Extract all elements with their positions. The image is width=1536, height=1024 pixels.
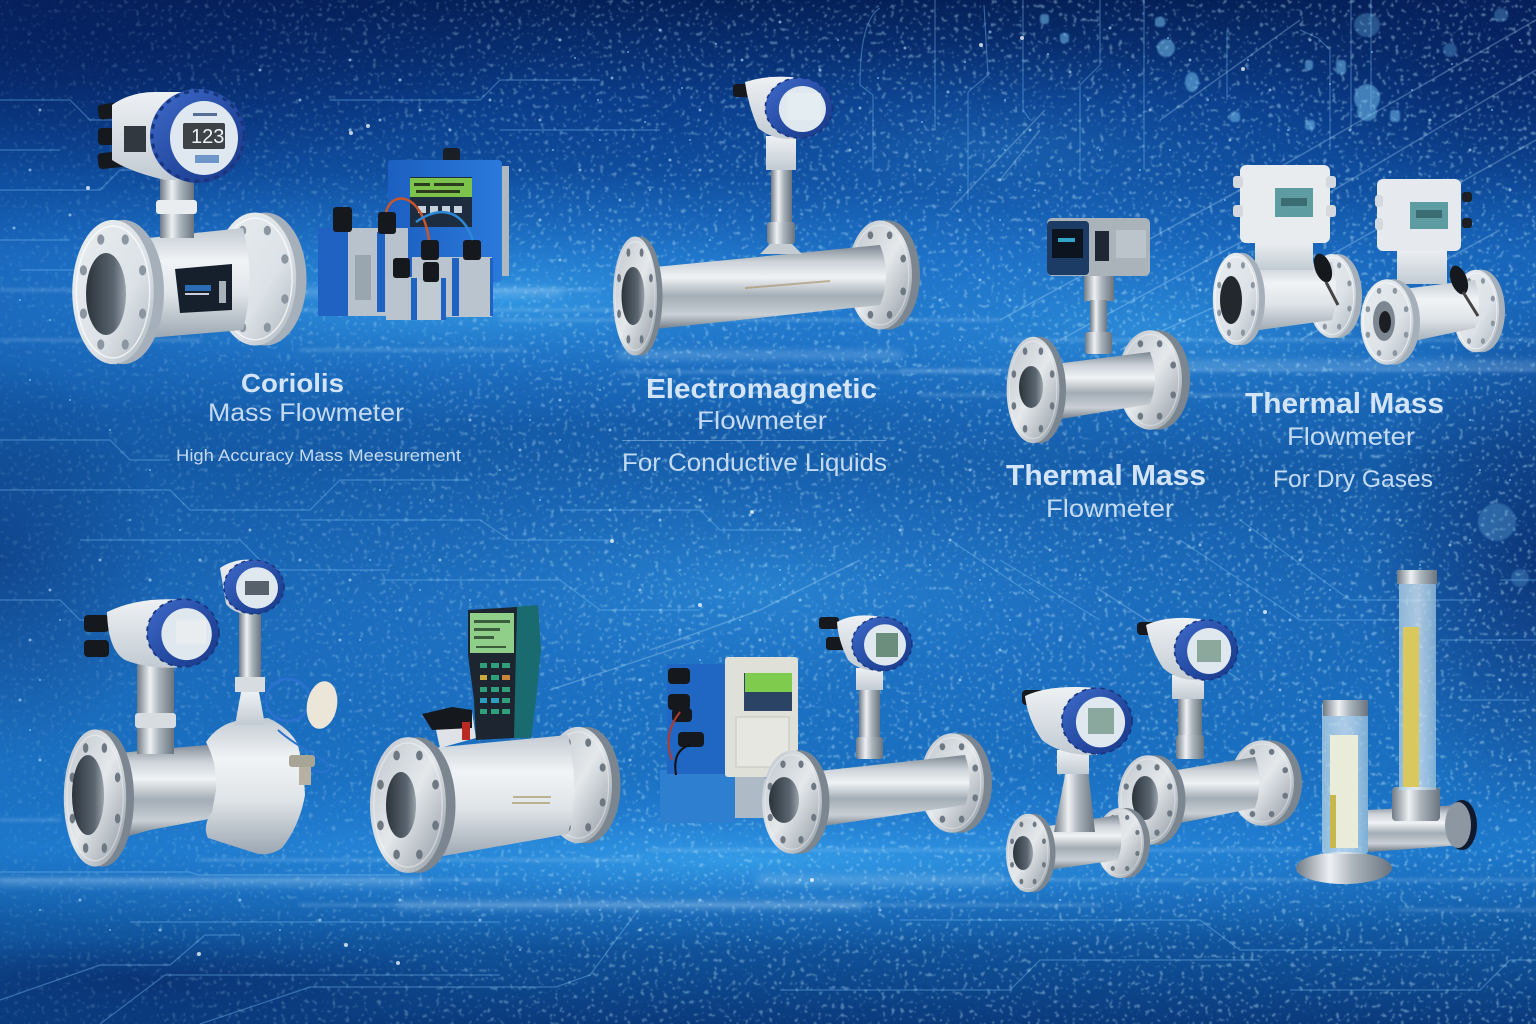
stem [856,668,883,759]
clamp [422,707,476,748]
box transmitter [1047,218,1150,276]
housing and bezel [112,89,246,183]
heading: Thermal Mass right [1245,388,1444,493]
wall-mount blue panel [388,148,509,282]
meter: thermal mass flowmeter, left [1007,218,1190,443]
heading: Thermal Mass left: Thermal Mass [1006,460,1206,492]
heading: Thermal Mass right: Thermal Mass [1245,388,1444,420]
head [1022,687,1132,774]
heading: Thermal Mass left [1006,460,1206,523]
heading: Electromagnetic: Flowmeter [697,407,827,435]
meter: front small flowmeter [1006,687,1150,892]
meter: short rotameter [1296,700,1392,884]
bore [86,253,126,335]
small stem [235,612,265,725]
neck [1255,240,1313,270]
heading: Electromagnetic [622,373,887,477]
cables [386,199,473,240]
heading: Thermal Mass right: For Dry Gases [1273,466,1433,493]
head [819,615,912,671]
blue side box [660,657,798,823]
small head [220,560,284,614]
meter: Coriolis mass flowmeter [72,89,306,364]
main head [84,599,219,668]
heading: Thermal Mass right: Flowmeter [1287,423,1415,451]
sensor cap [1310,251,1338,305]
meter: electromagnetic flowmeter [613,77,920,356]
heading: Coriolis: Coriolis [241,368,344,398]
pipe [120,743,230,838]
bulged body [206,718,305,854]
white pipe body [148,228,250,338]
heading: Thermal Mass left: Flowmeter [1046,495,1174,523]
meter: transmitter box with steel pipe [660,615,992,854]
meter: blue transmitter cluster [318,148,509,320]
stem [1084,275,1114,354]
neck and collar [156,172,197,238]
meter: white thermal pair, B [1361,179,1505,365]
meter: silver vortex with bulged body [64,560,341,867]
meter: silver body with handheld unit [370,605,620,873]
LCD display: 123 [191,126,224,148]
head [1137,618,1238,680]
heading: Coriolis: High Accuracy Mass Meesurement [176,446,461,465]
steel pipe [645,245,886,330]
connectors [97,101,129,169]
LCD display [183,113,225,163]
large stem [135,664,176,754]
box [1375,179,1472,251]
transmitter head [733,77,833,139]
handheld terminal [468,605,541,740]
label plate [175,264,232,313]
heading: Coriolis [176,368,461,465]
sensor boxes [318,207,408,316]
box [1233,165,1336,243]
coil and dish [266,679,341,785]
gold marking [512,797,551,803]
heading: Coriolis: Mass Flowmeter [208,399,404,427]
heading: Electromagnetic: For Conductive Liquids [622,449,887,477]
meter: rear steel flowmeter [1118,618,1302,845]
stem [760,136,802,254]
meter: tall rotameter [1368,570,1477,852]
meter: white thermal pair, A [1213,165,1362,345]
plate text strip [745,281,830,288]
heading: Electromagnetic: Electromagnetic [646,373,877,404]
